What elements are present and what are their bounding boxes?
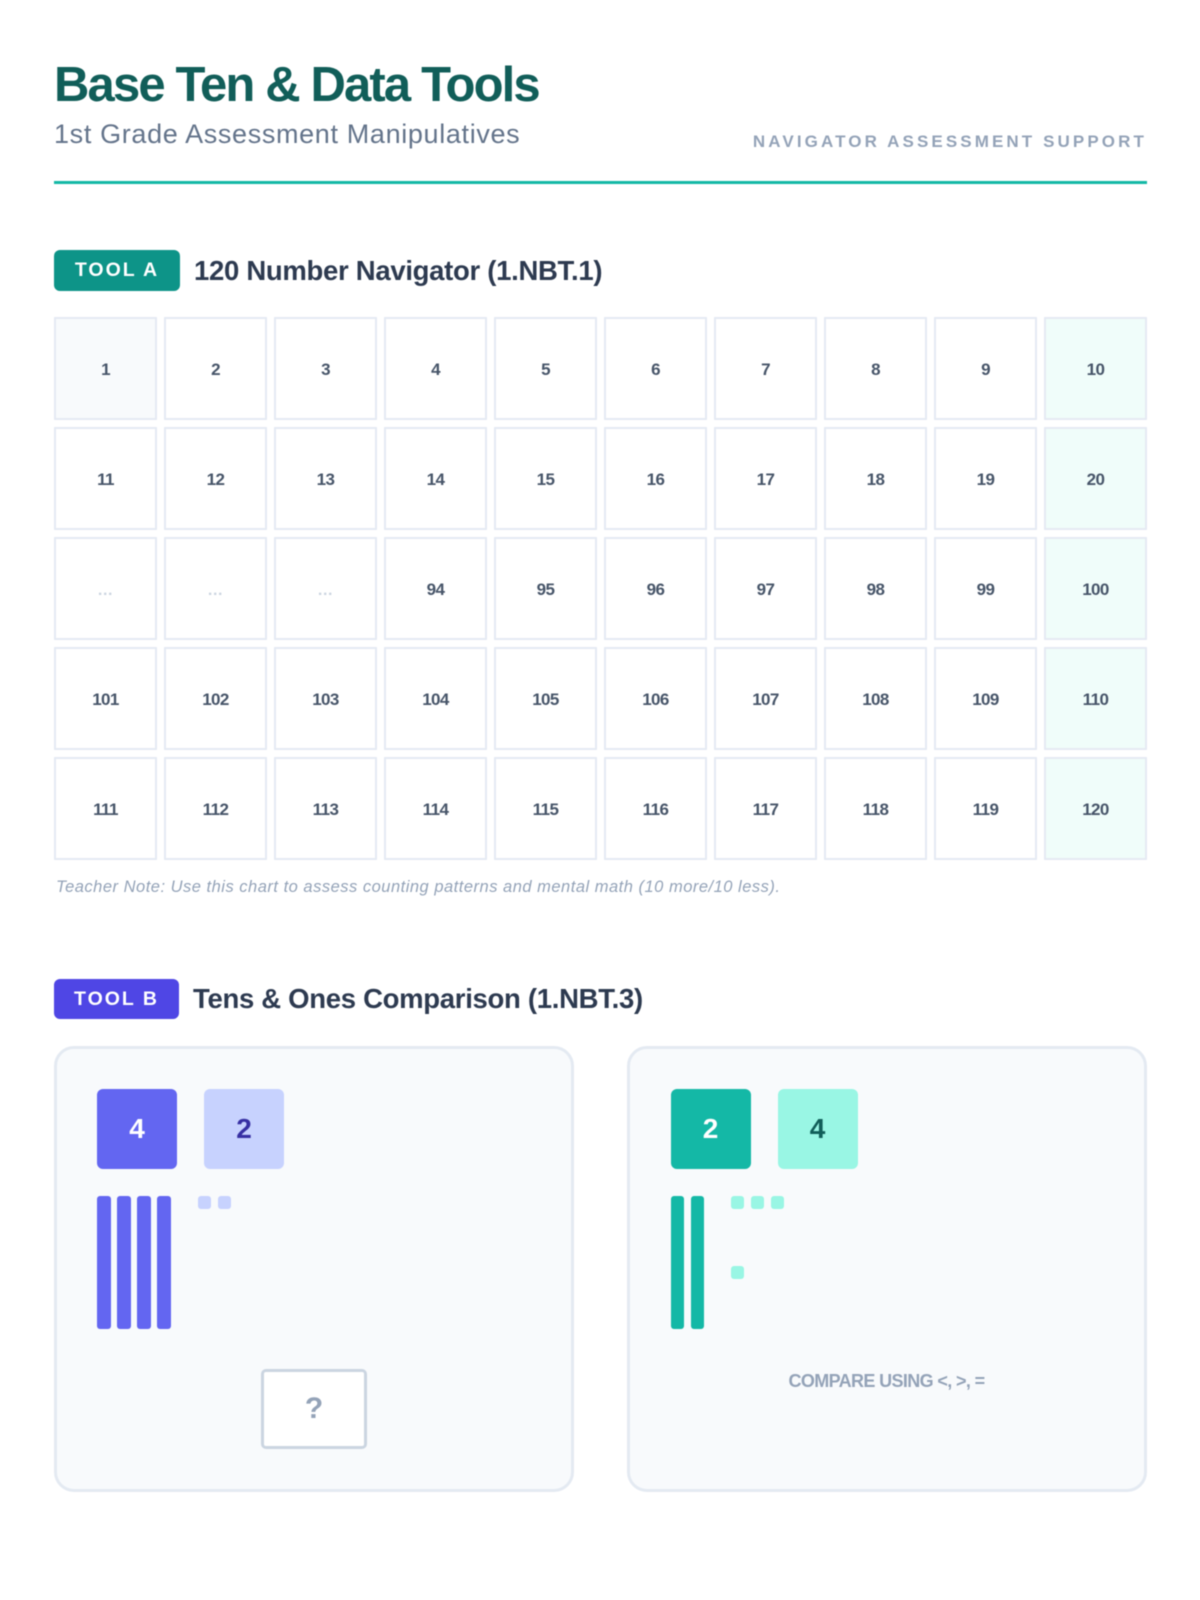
- number grid: 115: [533, 800, 558, 818]
- title: Base Ten & Data Tools: [54, 58, 539, 112]
- number grid: 120: [1082, 800, 1109, 818]
- number grid: 100: [1082, 580, 1109, 598]
- number grid: 1: [101, 360, 110, 378]
- number grid: 94: [427, 580, 444, 598]
- number grid: 6: [651, 360, 660, 378]
- tens rods: [670, 1195, 705, 1330]
- tile: ones 2: [204, 1089, 284, 1169]
- header tagline: NAVIGATOR ASSESSMENT SUPPORT: [753, 132, 1147, 151]
- number grid: 20: [1087, 470, 1104, 488]
- number grid: ...: [318, 582, 333, 599]
- number grid: ...: [208, 582, 223, 599]
- badge: tool B: [54, 979, 179, 1019]
- number grid: 104: [422, 690, 449, 708]
- subtitle: 1st Grade Assessment Manipulatives: [54, 119, 520, 149]
- number grid: 97: [757, 580, 774, 598]
- tile: tens 4: [97, 1089, 177, 1169]
- number grid: 116: [643, 800, 668, 818]
- number grid: 96: [647, 580, 664, 598]
- number grid: 11: [97, 470, 114, 488]
- right group: number 24: [670, 1088, 985, 1391]
- tile: ones 4: [778, 1089, 858, 1169]
- heading: tool A: 120 Number Navigator (1.NBT.1): [194, 255, 602, 286]
- number grid: 103: [312, 690, 339, 708]
- number grid: 117: [753, 800, 778, 818]
- number grid: 99: [977, 580, 994, 598]
- heading: tool B: Tens & Ones Comparison (1.NBT.3): [193, 983, 643, 1014]
- number grid: 113: [313, 800, 338, 818]
- tile: tens 2: 2: [703, 1113, 718, 1144]
- number grid: 18: [867, 470, 884, 488]
- number grid: 112: [203, 800, 228, 818]
- badge: tool A: [54, 250, 180, 291]
- number grid: 3: [321, 360, 330, 378]
- number grid: 9: [981, 360, 990, 378]
- number grid: [54, 316, 1148, 860]
- number grid: 10: [1087, 360, 1104, 378]
- number grid: 102: [202, 690, 229, 708]
- tile: tens 2: [670, 1089, 750, 1169]
- badge: tool B: TOOL B: [74, 988, 159, 1010]
- tile: ones 4: 4: [810, 1113, 825, 1144]
- badge: tool A: TOOL A: [75, 259, 159, 281]
- number grid: 16: [647, 470, 664, 488]
- number grid: 95: [537, 580, 554, 598]
- number grid: 101: [92, 690, 119, 708]
- tile: tens 4: 4: [129, 1113, 145, 1144]
- answer box: [261, 1369, 367, 1449]
- header rule: [54, 181, 1147, 184]
- number grid: 2: [211, 360, 220, 378]
- tens rods: [96, 1195, 172, 1330]
- tile: ones 2: 2: [236, 1113, 252, 1144]
- number grid: 13: [317, 470, 334, 488]
- number grid: 109: [972, 690, 999, 708]
- number grid: ...: [98, 582, 113, 599]
- compare instruction: COMPARE USING <, >, =: [788, 1371, 984, 1391]
- answer box: ?: [305, 1392, 323, 1425]
- number grid: 111: [93, 800, 118, 818]
- panel: left comparison card: [54, 1046, 574, 1492]
- number grid: 98: [867, 580, 884, 598]
- number grid: 8: [871, 360, 880, 378]
- number grid: 15: [537, 470, 554, 488]
- header: [53, 58, 1148, 185]
- teacher note: Teacher Note: Use this chart to assess counting patterns and mental math (10 more/10 less).: [56, 878, 780, 896]
- left group: number 42: [96, 1088, 368, 1450]
- number grid: 119: [973, 800, 998, 818]
- number grid: 118: [863, 800, 888, 818]
- ones units: [198, 1196, 232, 1210]
- number grid: 110: [1083, 690, 1108, 708]
- number grid: 17: [757, 470, 774, 488]
- number grid: 12: [207, 470, 224, 488]
- number grid: 19: [977, 470, 994, 488]
- ones units: [730, 1196, 784, 1280]
- number grid: 106: [642, 690, 669, 708]
- number grid: 114: [423, 800, 448, 818]
- number grid: 4: [431, 360, 440, 378]
- panel: right comparison card: [627, 1046, 1147, 1492]
- number grid: 108: [862, 690, 889, 708]
- number grid: 5: [541, 360, 550, 378]
- number grid: 14: [427, 470, 444, 488]
- number grid: 107: [752, 690, 779, 708]
- number grid: 105: [532, 690, 559, 708]
- number grid: 7: [761, 360, 770, 378]
